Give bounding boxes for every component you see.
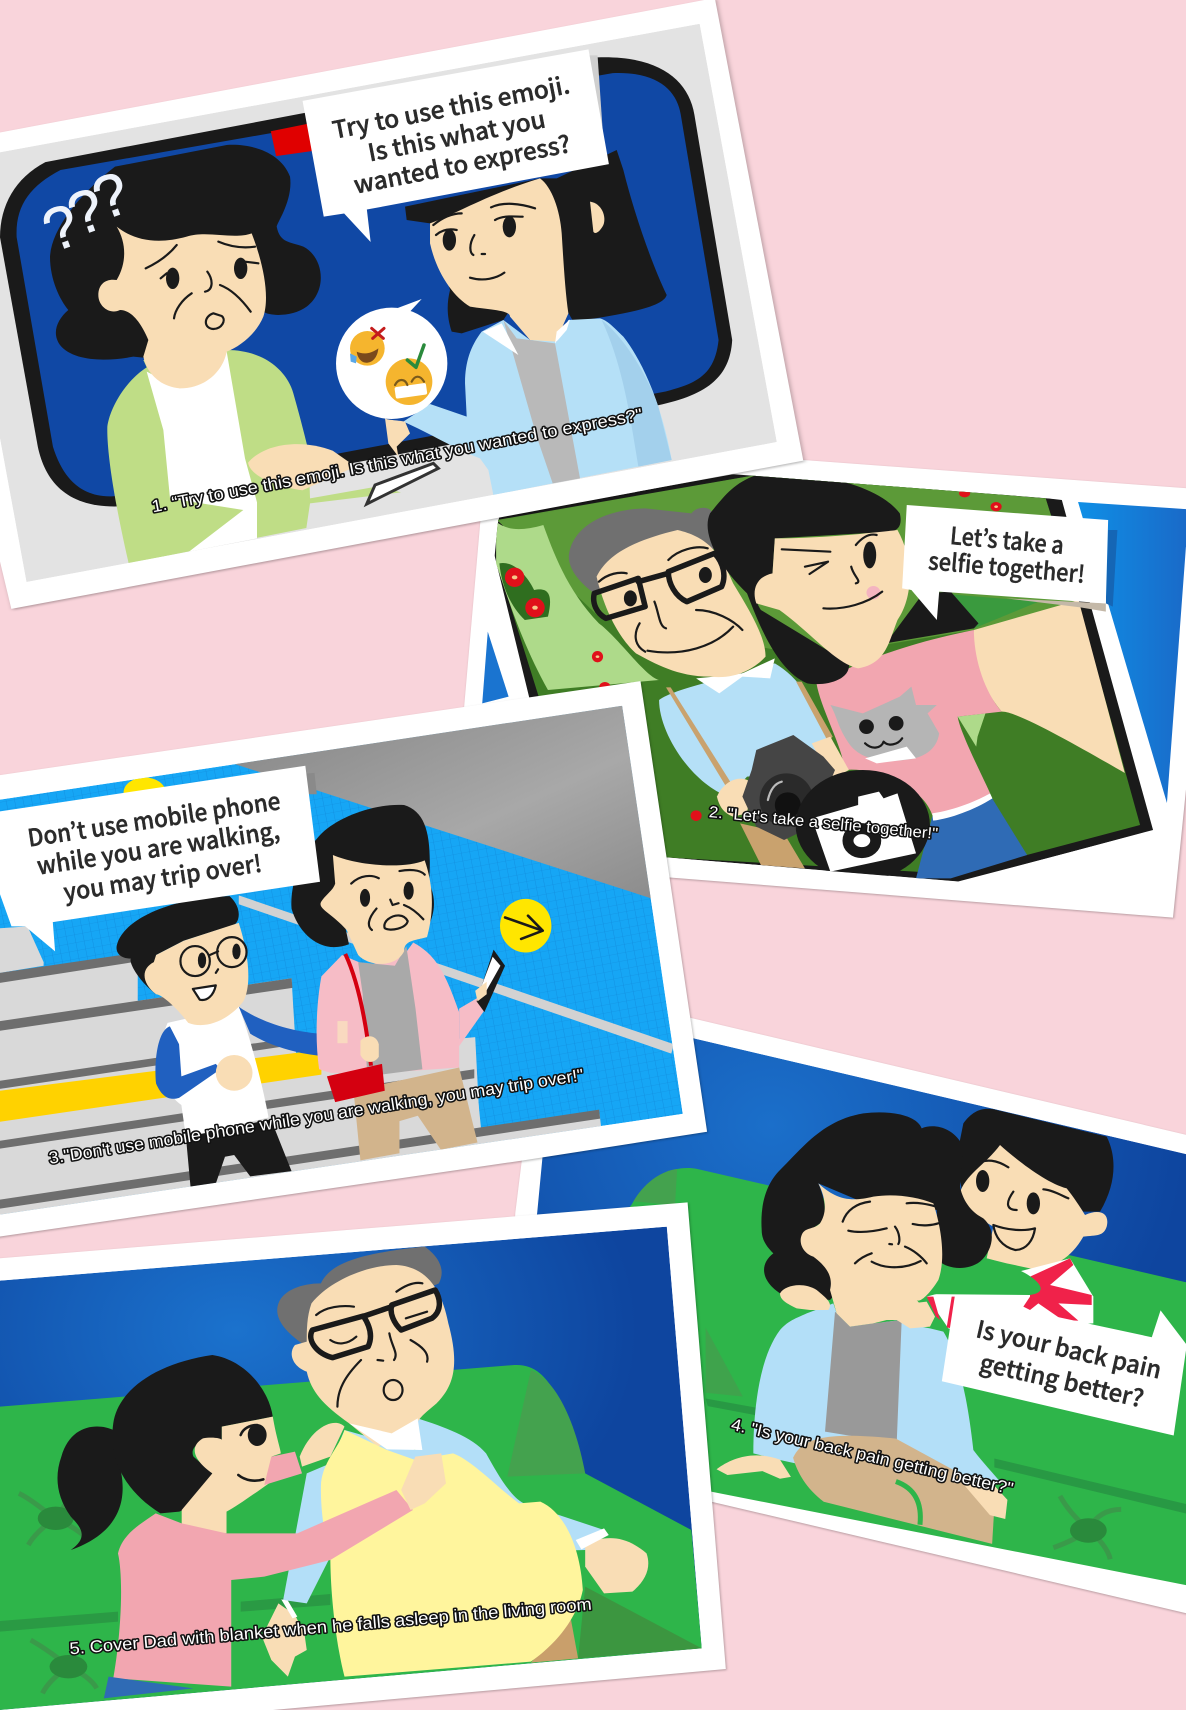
panel 3 illustration [0,681,707,1238]
child's striped shirt [927,1258,1093,1330]
dad's blue shirt [283,1418,604,1603]
grandmother's hair [761,1112,992,1300]
panel 4 bubble text: Is your back pain [973,1310,1165,1386]
hand holding fan [385,418,410,457]
young woman hair [405,150,667,333]
daughter's pink sweater [104,1452,413,1698]
phone [367,463,438,504]
panel 4 bubble text: getting better? [977,1343,1148,1414]
panel 4 caption: 4. "Is your back pain getting better?" [729,1415,1015,1498]
panel 2 caption: 2. "Let's take a selfie together!" [708,804,939,843]
panel 1 scene [0,24,777,582]
panel 1 bubble text: Is this what you [365,100,548,168]
panel 1: emoji [0,0,803,609]
panel 2 scene [482,470,1186,882]
child's hands on shoulders [780,1285,935,1328]
panel 1 white photo frame [0,0,803,609]
dad's trousers [531,1620,578,1663]
grandmother's blue cardigan [753,1303,1000,1500]
figures at true proportions [753,1109,1114,1500]
grey wall [0,24,777,582]
blue tiled wall [0,706,683,1215]
panel 1 speech bubble [303,49,609,242]
red flowers [505,489,1002,821]
smartphone [475,950,505,1012]
panel 1 bubble text: Try to use this emoji. [329,65,572,146]
woman's hair [291,805,434,947]
old woman green cardigan [107,350,401,563]
green blanket over child's arm [934,1258,1041,1295]
panel 4 scene [536,1038,1186,1586]
panel 3 bubble text [25,781,291,912]
panel 3 bubble text: Don’t use mobile phone [25,781,282,854]
camera icon [796,770,930,880]
boy's hair [117,896,239,994]
panel 2 bubble text: Let’s take a [949,516,1066,561]
panel 2 illustration [451,437,1186,918]
sofa button [1053,1496,1121,1559]
green sofa [630,1168,1186,1586]
grandfather's blue shirt [659,663,835,797]
panel 2: selfie together [451,437,1186,918]
girl's hair [708,474,901,684]
woman's face [321,855,432,964]
young woman and emoji fan [336,150,672,504]
panel 2 bubble text: selfie together! [927,541,1087,590]
girl's jeans [916,795,1027,878]
old woman hair [50,145,321,363]
panel 1 bubble text: wanted to express? [350,124,573,201]
woman's pants [354,1067,478,1160]
black camera frame [492,470,1153,882]
panel 3: don't use phone walking [0,681,707,1238]
child's face [960,1145,1107,1268]
shirt collar [349,1418,422,1450]
panel 5 illustration [0,1202,726,1710]
shirt collar [696,658,775,693]
girl's outstretched arm [972,600,1125,773]
pink t-shirt with cat [816,630,1002,821]
old woman face [98,227,266,388]
boy's torso [156,1007,319,1187]
yellow sign behind bubble [124,777,166,807]
panel 1 question marks: ? [59,175,113,249]
panel 1 caption: 1. “Try to use this emoji. Is this what you wanted to express?" [150,405,644,516]
panel 2 speech bubble [902,505,1117,620]
black window frame [0,57,732,506]
panel 3 white photo frame [0,681,707,1238]
dad's hands [262,1538,648,1677]
grandmother's hands [717,1455,1007,1519]
blue wall [0,1227,702,1710]
stairs [0,926,601,1219]
red sign [271,122,318,156]
blue window [17,73,719,496]
panel 3 bubble text: while you are walking, [34,811,282,882]
yellow arrow sign [500,899,551,952]
camera strap [666,682,833,868]
panel 4 illustration [500,983,1186,1618]
old woman [50,145,401,563]
panel 3 speech bubble [0,766,320,951]
panel 4 white photo frame [500,983,1186,1618]
child's hair [957,1109,1114,1212]
yellow blanket [321,1430,609,1677]
grandfather's grey hair [569,508,719,593]
daughter's hands holding blanket [300,1423,446,1510]
red shoulder bag [327,954,385,1102]
blue wall behind camera frame [482,502,1186,803]
boy's face and glasses [145,923,248,1025]
green sofa [0,1365,702,1710]
grandmother's face [801,1183,942,1327]
grandmother's trousers [793,1436,994,1544]
dad's face [292,1265,454,1447]
back hair of girl [886,592,979,643]
panel 2 bubble text [927,514,1089,590]
young woman face [430,178,568,343]
panel 4: back pain [500,983,1186,1618]
panel 1 question marks: ? [34,191,88,265]
grey diagonal ceiling [234,705,652,899]
dad's shirt cuff [281,1599,297,1618]
emoji speech bubble fan [336,299,447,419]
garden background [496,475,1140,874]
panel 3 scene [0,705,683,1219]
young woman blue jacket [403,318,672,495]
panel 1 question marks [34,159,138,265]
grandfather's face [594,530,766,677]
dad's grey hair [277,1247,442,1343]
young woman ear [590,202,604,233]
panel 2 white photo frame [451,437,1186,918]
handrail [239,895,674,1054]
woman's pink jacket [317,942,484,1076]
panel 5: cover dad with blanket [0,1202,726,1710]
camera body in hands [717,735,849,840]
panel 4 speech bubble [942,1295,1186,1436]
old woman's hand on phone [248,444,356,490]
sofa buttons [19,1493,97,1693]
panel 1 question marks: ? [84,159,138,233]
girl's face winking [755,530,910,668]
panel 5 white photo frame [0,1202,726,1710]
panel 3 caption: 3."Don't use mobile phone while you are walking, you may trip over!" [47,1065,585,1168]
blue wall [536,1038,1186,1282]
white shirt [147,352,257,552]
panel 1 bubble text [329,65,583,203]
panel 5 caption: 5. Cover Dad with blanket when he falls asleep in the living room [69,1595,592,1658]
panel 3 bubble text: you may trip over! [61,844,264,908]
panel 1 illustration [0,0,803,609]
panel 5 scene [0,1227,702,1710]
panel 4 bubble text [966,1310,1165,1417]
daughter's head [112,1355,281,1533]
daughter's ponytail [57,1427,123,1550]
